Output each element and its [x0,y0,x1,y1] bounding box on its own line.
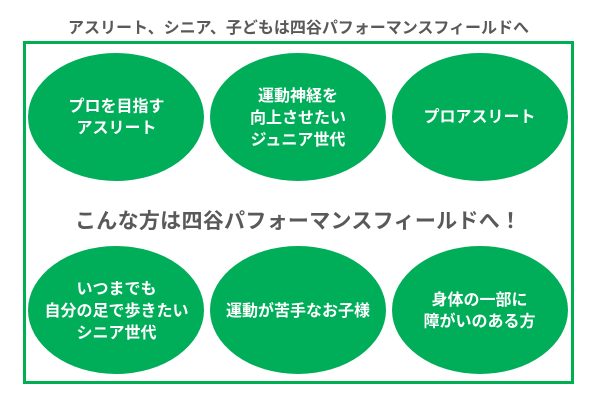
ellipse: seniors: 自分の足で歩きたい [44,301,189,320]
ellipse: people with disabilities [392,246,568,374]
panel: green frame [24,42,572,382]
ellipse: people with disabilities: 身体の一部に [431,291,528,309]
ellipse: pro aspirants: プロを目指す [68,98,165,116]
ellipse: children [210,246,386,374]
ellipse: pro athletes [392,53,568,181]
ellipse: seniors: シニア世代 [76,324,157,342]
ellipse: juniors: ジュニア世代 [251,131,345,149]
ellipse: juniors [210,53,386,181]
ellipse: pro athletes: プロアスリート [423,108,536,126]
ellipse: pro aspirants [28,53,204,181]
ellipse: pro aspirants: アスリート [76,120,157,137]
ellipse: juniors: 向上させたい [250,109,346,127]
ellipse: people with disabilities: 障がいのある方 [423,312,536,330]
title: アスリート、シニア、子どもは四谷パフォーマンスフィールドへ [68,19,529,37]
ellipse: juniors: 運動神経を [258,87,338,105]
ellipse: seniors: いつまでも [76,280,157,298]
ellipse: seniors [28,246,204,374]
ellipse: children: 運動が苦手なお子様 [226,301,370,320]
subheading: こんな方は四谷パフォーマンスフィールドへ！ [75,210,521,233]
